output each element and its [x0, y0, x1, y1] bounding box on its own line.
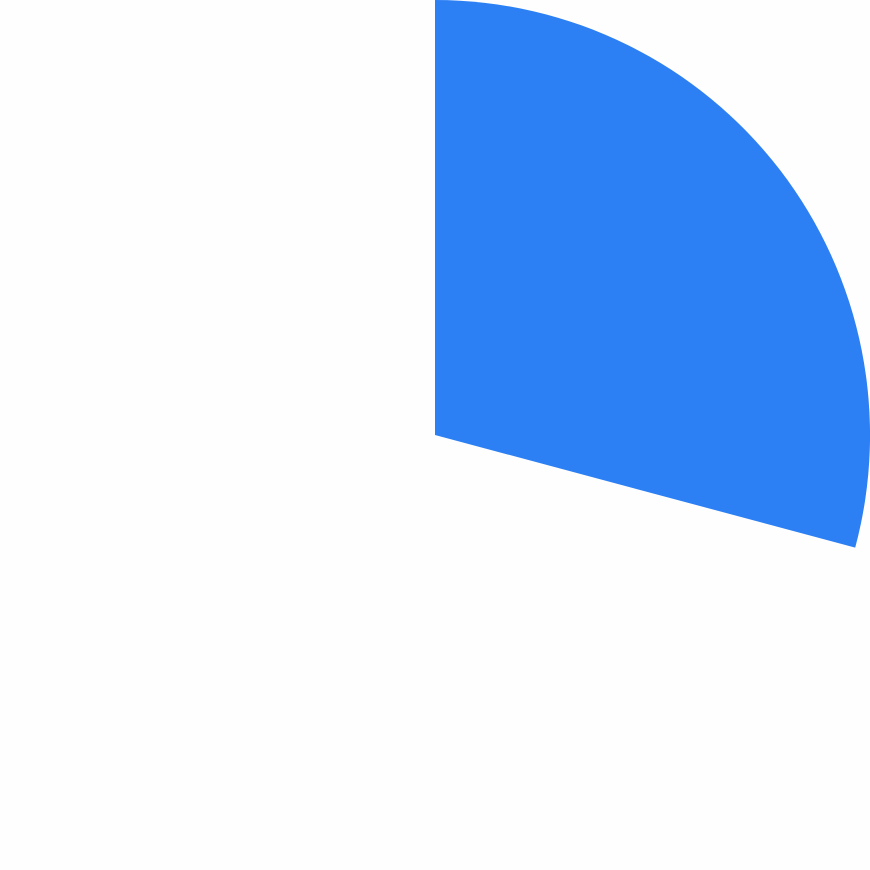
pie slice: blue sector — [435, 0, 870, 548]
